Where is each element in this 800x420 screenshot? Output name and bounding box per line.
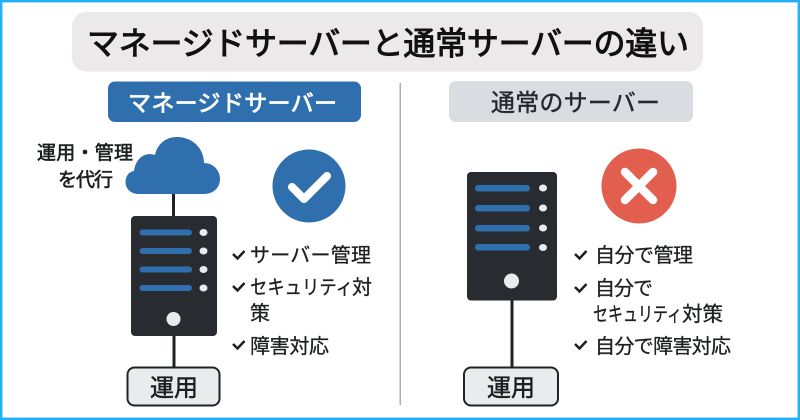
item: security — [233, 276, 372, 325]
label box: operations — [128, 368, 220, 406]
feature list: managed — [233, 244, 372, 358]
icon: check badge — [272, 150, 346, 222]
label box: operations — [464, 368, 558, 406]
connector: cloud to server — [172, 193, 175, 217]
item: self-managed security: 自分で — [595, 277, 653, 300]
title: マネージドサーバーと通常サーバーの違い — [87, 26, 689, 62]
title — [72, 12, 703, 72]
label box: operations: 運用 — [487, 375, 535, 402]
callout: operations and management on your behalf — [37, 142, 133, 191]
item: server management: サーバー管理 — [250, 244, 371, 267]
item: incident response: 障害対応 — [250, 335, 329, 358]
callout: operations and management on your behalf: を代行 — [58, 169, 113, 191]
connector: server to operations — [510, 300, 514, 367]
heading: regular server: 通常のサーバー — [491, 90, 660, 117]
heading: managed server: マネージドサーバー — [128, 90, 337, 116]
icon: cross badge — [602, 148, 676, 224]
icon: cloud — [126, 137, 220, 194]
item: self-managed incident response: 自分で障害対応 — [595, 335, 731, 358]
item: self-managed security: セキュリティ — [593, 304, 682, 326]
label box: operations: 運用 — [150, 375, 198, 402]
item: self-managed security — [575, 277, 723, 326]
panel: managed server — [37, 82, 372, 406]
callout: operations and management on your behalf: 運用・管理 — [37, 142, 133, 164]
icon: server — [131, 216, 217, 336]
item: security: 対 — [352, 276, 372, 299]
panel: regular server — [449, 81, 731, 406]
heading: managed server — [108, 82, 361, 122]
divider — [400, 83, 401, 405]
item: self-managed security: 対策 — [682, 303, 723, 326]
item: security: セキュリティ — [250, 277, 353, 299]
item: self-managed: 自分で管理 — [595, 244, 693, 267]
icon: server — [467, 172, 557, 300]
connector: server to operations — [172, 336, 176, 367]
item: security: 策 — [250, 302, 270, 325]
feature list: regular — [575, 244, 731, 358]
heading: regular server — [449, 81, 693, 122]
